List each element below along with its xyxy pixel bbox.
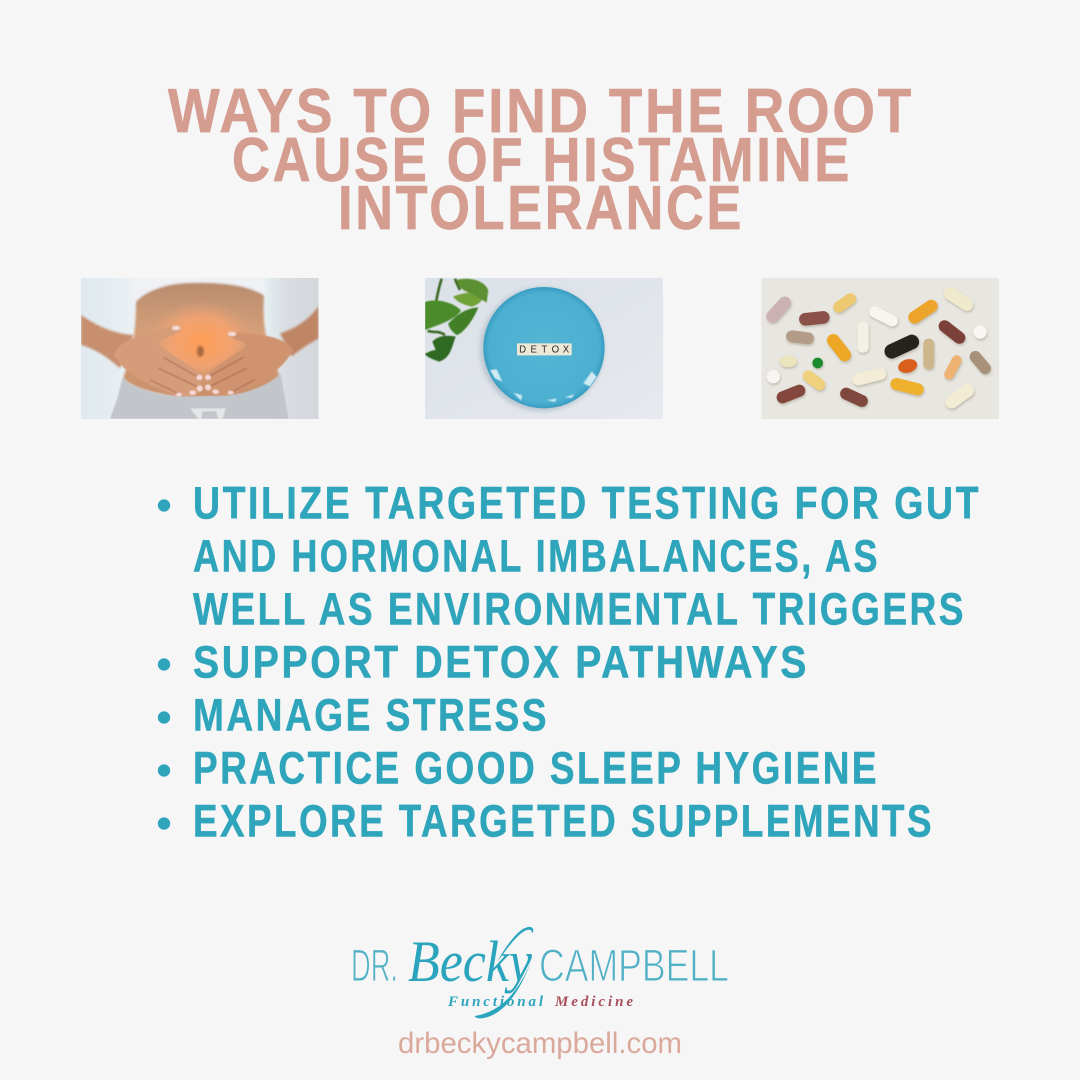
detox tiles: X [563,345,570,356]
logo: Dr. Becky Campbell Functional Medicine: DR. [351,940,398,991]
bullet 1: AND HORMONAL IMBALANCES, AS [193,530,880,582]
title: WAYS TO FIND THE ROOT [168,77,914,146]
bullet 1 [158,478,981,634]
logo: Dr. Becky Campbell Functional Medicine [351,927,729,1018]
detox tiles: O [552,345,560,356]
title [168,77,914,243]
plant [425,279,488,362]
website url: drbeckycampbell.com [398,1027,682,1060]
photo: assorted supplement capsules [761,278,999,419]
plate [480,287,605,411]
arms [81,315,133,368]
bullet 2: SUPPORT DETOX PATHWAYS [193,636,809,688]
bullet 4: PRACTICE GOOD SLEEP HYGIENE [193,742,879,794]
logo: Dr. Becky Campbell Functional Medicine: Medicine [554,994,633,1010]
bullet 5: EXPLORE TARGETED SUPPLEMENTS [193,796,934,846]
right hand [208,332,293,374]
title: CAUSE OF HISTAMINE [232,126,852,195]
photo: hands on glowing abdomen [81,278,319,419]
sweatpants [110,374,289,419]
left hand [113,326,203,397]
bullet list [158,478,981,846]
logo: Dr. Becky Campbell Functional Medicine: Functional [447,994,544,1010]
title: INTOLERANCE [338,174,744,243]
detox tiles: D [519,345,526,356]
nails [172,326,236,397]
logo: Dr. Becky Campbell Functional Medicine: Becky [408,929,532,994]
detox tiles: T [541,345,547,356]
detox tiles: E [530,345,537,356]
bullet 3: MANAGE STRESS [193,690,549,740]
photo: detox plate [425,278,663,419]
logo: Dr. Becky Campbell Functional Medicine: CAMPBELL [539,940,729,991]
abdomen [123,283,279,398]
detox tiles [517,343,572,356]
